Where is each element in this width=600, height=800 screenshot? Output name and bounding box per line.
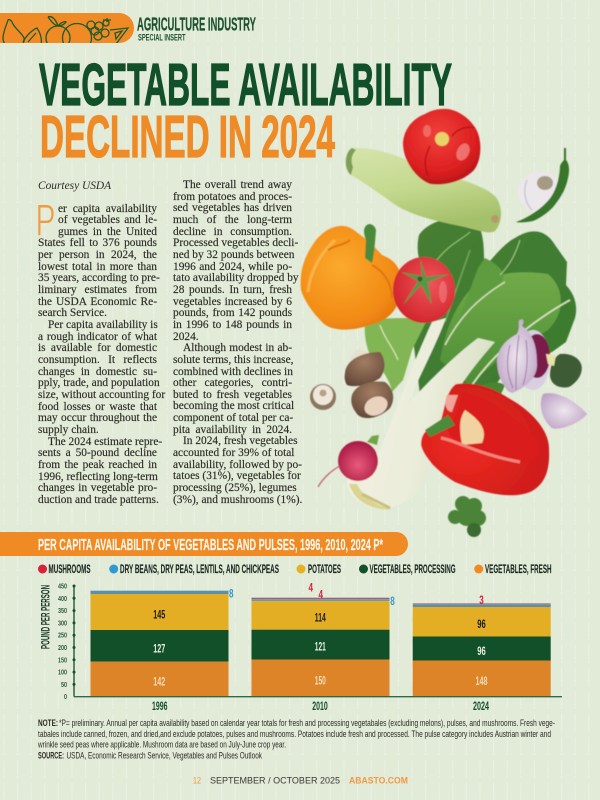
chart header bar [0,532,408,556]
icon: radish [318,435,379,487]
category labels: 2024 [473,701,489,713]
bar: 2024 [413,603,551,696]
title: DECLINED IN 2024 [40,104,335,170]
text column 1: 35 years, according to pre- [38,272,160,284]
text column 1: the USDA Economic Re- [38,296,157,308]
chart notes: wrinkle seed peas where applicable. Mushroom data are based on July-June crop year. [37,740,286,750]
text column 1: 1996, reflecting long-term [38,471,158,483]
chart notes: USDA, Economic Research Service, Vegetables and Pulses Outlook [66,750,262,760]
text column 1: search Service. [38,307,107,319]
text column 1: gumes in the United [58,226,157,238]
y axis: 300 [58,620,67,627]
text column 1: er capita availability [58,202,157,214]
text column 2: ned by 32 pounds between [173,249,294,261]
y axis: 450 [58,584,67,590]
section label: AGRICULTURE INDUSTRY [137,14,256,34]
value labels: 4 [318,589,323,601]
text column 2: becoming the most critical [173,400,294,412]
y axis: 350 [58,608,67,615]
text column 2: much of the long-term [173,214,292,226]
footer [193,775,408,786]
icon: red onion [497,319,550,393]
drop cap: P [36,194,56,246]
text column 1: food losses or waste that [38,401,157,413]
icon: zucchini [346,148,501,232]
value labels: 127 [153,644,165,656]
text column 2: buted to fresh vegetables [173,389,292,401]
text column 2 [172,179,302,506]
icon: pepper orange [301,224,402,330]
value labels [153,582,488,688]
icon: bok choy stalk [347,318,495,509]
text column 2: 1996 and 2024, while po- [173,261,292,273]
icon: mushrooms [310,349,393,419]
text column 2: decline in consumption. [173,226,292,238]
text column 1: is available for domestic [38,342,157,354]
value labels: 8 [229,588,234,600]
text column 2: 2024. [173,331,199,343]
text column 2: component of total per ca- [173,412,293,424]
text column 1: States fell to 376 pounds [38,237,157,249]
text column 1 [38,202,166,506]
text column 2: pounds, from 142 pounds [173,307,292,319]
text column 2: in 1996 to 148 pounds in [173,319,292,331]
text column 2: (3%), and mushrooms (1%). [173,494,302,506]
text column 1: consumption. It reflects [38,354,157,366]
text column 1: liminary estimates from [38,284,157,296]
text column 1: sents a 50-pound decline [38,447,157,459]
bar: 1996 [90,591,228,696]
chart notes: NOTE: [38,718,58,728]
vegetable illustration [301,109,587,537]
icon: garlic [518,172,563,212]
text column 2: solute terms, this increase, [173,354,294,366]
x axis [74,696,562,698]
text column 1: lowest total in more than [38,261,157,273]
text column 1: Per capita availability is [48,319,158,331]
text column 1: The 2024 estimate repre- [48,436,162,448]
value labels: 4 [308,582,313,594]
title [39,52,452,170]
footer: ABASTO.COM [349,775,408,786]
footer: 12 [193,775,201,786]
icon: red pepper half [421,384,549,495]
chart legend [38,564,552,576]
value labels: 96 [477,646,486,658]
text column 1: duction and trade patterns. [38,494,159,506]
icon: green chili [516,148,569,222]
text column 2: sed vegetables has driven [173,202,292,214]
y axis: 0 [64,694,67,701]
text column 2: Processed vegetables decli- [173,237,298,249]
value labels: 142 [153,676,165,688]
text column 2: vegetables increased by 6 [173,296,292,308]
y axis: 250 [58,633,67,640]
text column 1: per person in 2024, the [38,249,157,261]
text column 2: In 2024, fresh vegetables [183,435,298,447]
text column 2: accounted for 39% of total [173,447,294,459]
byline: Courtesy USDA [38,180,111,192]
section label [137,14,256,44]
chart legend: MUSHROOMS [48,564,91,576]
value labels: 8 [390,596,395,608]
y axis: 100 [58,670,67,677]
y axis: 150 [58,657,67,664]
chart notes: SOURCE: [38,750,64,760]
text column 2: tatoes (31%), vegetables for [173,470,301,482]
bar: 2010 [252,598,390,696]
text column 1: supply chain. [38,424,99,436]
text column 1: may occur throughout the [38,412,157,424]
value labels: 145 [153,609,166,621]
text column 2: other categories, contri- [173,377,292,389]
icon: fruit line art [2,16,130,43]
icon: tomato with calyx [393,257,455,323]
section banner [0,13,134,43]
value labels: 121 [315,642,326,654]
text column 2: processing (25%), legumes [173,482,297,494]
value labels: 114 [315,612,326,624]
icon: onion wedge [541,393,587,429]
y axis: 50 [61,682,67,689]
section label: SPECIAL INSERT [138,32,186,44]
stacked bar chart [40,582,562,713]
text column 2: from potatoes and proces- [173,191,292,203]
value labels: 148 [476,676,488,688]
icon: broccoli [546,354,582,387]
text column 2: combined with declines in [173,366,293,378]
text column 2: tato availability dropped by [173,272,299,284]
icon: bok choy leaves [365,218,576,425]
text column 2: availability, followed by po- [173,459,302,471]
value labels: 96 [477,619,486,631]
y axis title: POUND PER PERSON [40,585,52,649]
icon: red tomato [403,109,480,184]
category labels: 2010 [312,701,328,713]
text column 2: pita availability in 2024. [173,424,292,436]
icon: bottom broccoli [448,496,486,537]
y axis: 200 [58,645,67,652]
y axis: 400 [58,596,67,603]
text column 1: from the peak reached in [38,459,157,471]
chart legend: DRY BEANS, DRY PEAS, LENTILS, AND CHICKPEAS [120,564,279,576]
category labels [152,701,489,713]
chart legend: POTATOES [308,564,341,576]
text column 2: Although modest in ab- [183,342,292,354]
text column 1: a rough indicator of what [38,331,157,343]
category labels: 1996 [152,701,168,713]
text column 2: 28 pounds. In turn, fresh [173,284,292,296]
text column 1: of vegetables and le- [58,214,157,226]
chart notes [37,718,555,760]
text column 1: changes in domestic su- [38,366,157,378]
text column 2: The overall trend away [183,179,292,191]
y axis [58,584,76,701]
text column 1: changes in vegetable pro- [38,482,157,494]
value labels: 150 [315,675,326,687]
chart legend: VEGETABLES, PROCESSING [370,564,456,576]
value labels: 3 [479,595,484,607]
text column 1: size, without accounting for [38,389,165,401]
footer: SEPTEMBER / OCTOBER 2025 [210,775,340,786]
text column 1: pply, trade, and population [38,377,160,389]
